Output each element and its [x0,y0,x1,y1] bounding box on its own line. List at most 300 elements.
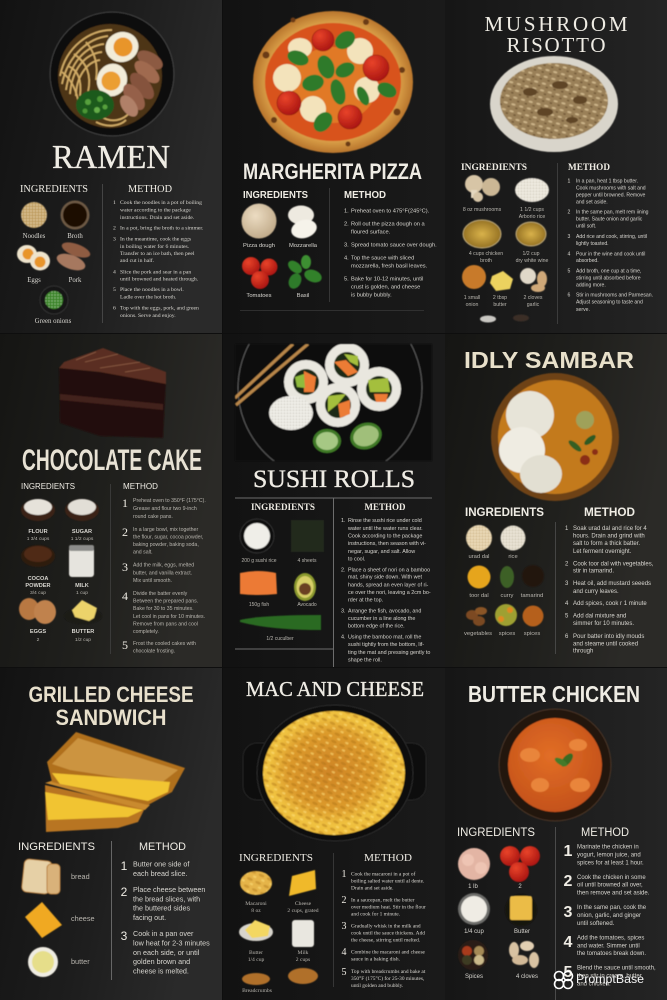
ingredients: cake: 1/2 cup [75,637,91,643]
image: pizza [253,11,413,153]
ingredients: sushi [240,519,324,642]
method text: ramen: water according to the package [120,208,191,214]
method text: ramen: Slice the pork and sear in a pan [120,270,191,276]
method text: grilled cheese: facing out. [133,913,166,922]
method text: butter chicken: spices for at least 1 hour. [577,860,644,866]
ingredients: mac: Macaroni [245,901,267,907]
method text: cake: Grease and flour two 9-inch [133,506,197,512]
method text: pizza: 5. [344,276,349,282]
method text: sushi: 4. [341,634,346,640]
panel: sushi rolls [234,334,445,667]
heading: method: METHOD [364,853,412,864]
method text: cake: Add the milk, eggs, melted [133,562,194,568]
panel: ramen [0,0,222,333]
method text: risotto: Stir in mushrooms and Parmesan. [576,292,653,298]
ingredients: mac: Breadcrumbs [242,988,272,994]
method text: idly: Add spices, cook r 1 minute [573,601,647,607]
method text: ramen: Cook the noodles in a pot of boiling [120,199,202,206]
method text: risotto: Pour in the wine and cook until [576,252,645,258]
method text: butter chicken: and water. Simmer until [577,944,640,950]
ingredients: ramen: Pork [69,277,82,284]
ingredients: ramen: Eggs [27,277,41,284]
heading: ingredients: INGREDIENTS [461,163,527,173]
method numbers: butter chicken: 1 [564,843,573,860]
method text: risotto: 4 [568,252,570,258]
ingredients: mac: 2 cups, grated [287,908,319,914]
image: risotto bowl [490,56,618,152]
ingredients: butter chicken: 1/4 cup [464,929,485,935]
image: idly bowl [491,373,619,501]
ingredients: butter chicken: 2 [518,884,522,890]
method text: ramen: In a pot, bring the broth to a simmer. [120,226,204,232]
method text: pizza: crust is golden, and cheese [351,284,420,290]
method text: sushi: Rinse the sushi rice under cold [348,518,422,524]
ingredients: sushi: 150g fish [249,602,269,608]
method text: idly: and curry leaves. [573,589,619,595]
method numbers: cake: 1 [122,496,128,510]
method text: butter chicken: then remove and set aside. [577,890,650,896]
panel: idly sambar [445,334,667,667]
panel: mac and cheese [223,668,445,1000]
method text: butter chicken: Blend the sauce until smooth, [577,966,656,972]
method text: cake: baking powder, baking soda, [133,542,199,548]
ingredients: risotto: 2 cloves [523,295,543,301]
method text: ramen: instructions. Drain and set aside. [120,215,195,221]
method text: sushi: cucumber in a line along the [348,616,415,622]
method text: risotto: 6 [568,292,570,298]
method numbers: grilled cheese: 3 [121,929,128,943]
panel: chocolate cake [0,334,222,667]
ingredients: mac: Milk [298,950,309,956]
title: butter chicken: BUTTER CHICKEN [468,681,640,707]
ingredients: risotto: garlic [527,302,540,308]
ingredients: risotto: 8 oz mushrooms [463,207,502,213]
method numbers: butter chicken: 5 [564,964,573,981]
method text: grilled cheese: each bread slice. [133,869,187,878]
heading: method: METHOD [584,507,635,519]
ingredients: idly: vegetables [464,631,492,637]
image: cake slice [59,348,166,438]
method text: sushi: Place a sheet of nori on a bamboo [348,568,430,574]
ingredients: pizza: Tomatoes [246,293,272,299]
method text: risotto: 2 [568,210,570,216]
image: ramen bowl [50,12,174,136]
method text: risotto: pepper until browned. Remove [576,192,646,198]
heading: ingredients: INGREDIENTS [239,853,313,864]
method text: pizza: Top the sauce with sliced [351,256,414,262]
method text: risotto: Add broth, one cup at a time, [576,268,641,274]
ingredients: ramen: Green onions [35,318,72,325]
method text: pizza: Bake for 10-12 minutes, until [351,276,423,282]
method text: ramen: until browned and heated through. [120,276,199,282]
method text: idly: Soak urad dal and rice for 4 [573,526,647,532]
heading: method: METHOD [581,827,629,839]
ingredients: risotto: onion [466,302,478,308]
method text: pizza: 1. [344,208,349,214]
method text: sushi: Arrange the fish, avocado, and [348,608,421,614]
method text: risotto: In a pan, heat 1 tbsp butter. [576,178,638,184]
method text: cake: Preheat oven to 350°F (175°C). [133,498,206,504]
method text: ramen: onions. Serve and enjoy. [120,313,176,319]
ingredients: idly: toor dal [469,593,489,599]
method text: sushi: 3. [341,608,346,614]
method text: cake: Frost the cooled cakes with [133,641,196,647]
method text: sushi: bottom edge of the rice. [348,624,405,630]
method text: cake: and salt. [133,550,153,556]
image: curry bowl [499,709,611,821]
method text: sushi: 2. [341,568,346,574]
method text: butter chicken: and chicken. [577,982,611,988]
ingredients: mac: Cheese [295,901,312,907]
method text: risotto: butter. Saute onion and garlic [576,216,643,222]
ingredients: mac [239,870,319,994]
method text: cake: Let cool in pans for 10 minutes. [133,614,205,620]
heading: method: METHOD [128,184,172,195]
method numbers: butter chicken: 3 [564,904,573,921]
method text: cake: In a large bowl, mix together [133,527,198,533]
method text: idly: Pour batter into idly mouds [573,634,644,640]
method numbers: cake: 5 [122,638,128,652]
watermark: PromptBase: PromptBase [576,972,644,986]
method text: grilled cheese: on each side, or until [133,948,200,957]
ingredients: cake: 3/4 cup [30,590,46,596]
method text: ramen: Top with the eggs, pork, and green [120,306,199,312]
ingredients: grilled cheese: bread [71,872,90,881]
method numbers: cake: 4 [122,589,128,603]
method text: butter chicken: Cook the chicken in some [577,875,646,881]
method text: ramen: Place the noodles in a bowl. [120,287,184,293]
ingredients: grilled cheese: cheese [71,914,95,923]
method text: risotto: Add rice and cook, stirring, until [576,234,647,240]
method text: idly: stir in tamarind. [573,568,614,574]
method text: risotto: adding more. [576,282,606,288]
image: sushi plate [234,343,432,462]
panel: mushroom risotto [445,0,667,333]
method text: ramen: Ladle over the hot broth. [120,294,177,300]
panel: grilled cheese [0,668,222,1000]
method text: pizza: Roll out the pizza dough on a [351,222,426,228]
method text: idly: 4 [565,601,569,607]
method text: pizza: is bubby bubbly. [351,292,392,298]
panel: margherita pizza [223,0,445,333]
ingredients: cake: 1 cup [76,590,88,596]
method text: mac: cook until the sauce thickens. Add [351,930,425,936]
method text: risotto: In the same pan, melt rem iining [576,210,649,216]
method numbers: mac: 2 [342,895,346,906]
method text: sushi: rder at the top. [348,598,383,604]
method text: idly: 1 [565,526,569,532]
method text: sushi: negar, sugar, and salt. Allow [348,549,415,555]
method text: idly: Add dal mixture and [573,614,626,620]
method text: mac: In a saucepan, melt the butter [351,898,415,904]
method text: cake: the flour, sugar, cocoa powder, [133,534,203,540]
watermark: PromptBase [554,972,644,988]
method text: butter chicken: Add the tomatoes, spices [577,936,644,942]
ingredients: cake: COCOA [28,576,48,582]
method numbers: mac: 5 [342,967,346,978]
method text: ramen: In the meantime, cook the eggs [120,236,192,242]
ingredients: idly: spices [499,631,515,637]
method text: butter chicken: the tomatoes break down. [577,951,646,957]
ingredients: butter chicken: Spices [465,974,483,980]
ingredients: cake: POWDER [25,583,51,589]
ingredients: butter chicken: 1 lb [468,884,478,890]
heading: method: METHOD [344,190,386,201]
title: grilled cheese sandwich: GRILLED CHEESE [28,682,194,707]
ingredients: grilled cheese [21,859,95,977]
method text: idly: simmer for 10 minutes. [573,621,634,627]
method text: risotto: until soft. [576,224,596,230]
method text: cake: round cake pans. [133,514,173,520]
method text: butter chicken: then stir in cream, butter [577,974,642,980]
method text: risotto: stirring until absorbed before [576,276,641,282]
method text: mac: Cook the macaroni in a pot of [351,870,416,878]
method text: pizza: mozzarella, fresh basil leaves. [351,264,428,270]
method text: idly: salt to form a thick batter. [573,541,640,547]
method text: cake: Bake for 30 to 35 minutes. [133,606,194,612]
ingredients: mac: 8 oz [251,908,261,914]
method text: grilled cheese: the bread slices, with [133,894,200,904]
ingredients: butter chicken: Butter [514,929,530,935]
ingredients: cake [19,499,102,643]
method text: grilled cheese: cheese is melted. [133,966,189,976]
method text: sushi: instructions, then season with vi- [348,541,426,547]
ingredients: pizza [242,204,324,299]
title: grilled cheese sandwich: SANDWICH [56,705,166,730]
method text: risotto: Adjust seasoning to taste and [576,300,643,306]
title: mushroom risotto: RISOTTO [506,33,606,57]
method text: mac: sauce in a baking dish. [351,956,400,962]
heading: method: METHOD [568,163,610,173]
method numbers: grilled cheese: 2 [121,885,128,899]
ingredients: mac: Butter [249,950,263,956]
method text: pizza: 2. [344,222,349,228]
heading: ingredients: INGREDIENTS [21,482,75,491]
ingredients: cake: SUGAR [72,529,92,535]
method text: grilled cheese: Butter one side of [133,860,189,868]
ingredients: pizza: Basil [297,293,309,299]
title: mushroom risotto [484,12,628,57]
method text: mac: until golden and bubbly. [351,983,403,989]
method text: sushi: hands, spread an even layer of ri- [348,582,429,588]
method text: mac: boiling salted water until al dente. [351,878,424,884]
ingredients: risotto: dry white wine [516,258,549,264]
method text: pizza: Preheat oven to 475°F(245°C). [351,208,430,214]
heading: ingredients: INGREDIENTS [251,502,315,512]
heading: method: METHOD [123,482,158,491]
method numbers: mac: 3 [342,921,346,932]
method numbers: butter chicken: 2 [564,873,573,890]
method text: sushi: ting the mat and pressing gently to [348,650,430,656]
method text: sushi: water until the water runs clear. [347,526,423,532]
method text: idly: through [573,648,593,654]
heading: ingredients: INGREDIENTS [20,184,88,195]
ingredients: risotto: broth [480,258,492,264]
method text: ramen: Transfer to an ice bath, then peel [120,250,195,257]
method text: mac: and cook for 1 minute. [351,910,400,918]
method text: risotto: absorbed. [576,258,599,264]
ingredients: risotto: butter [493,302,507,308]
ingredients: pizza: Mozzarella [289,243,318,249]
ingredients: cake: BUTTER [72,629,94,635]
method text: pizza: 3. [344,242,349,248]
ingredients: risotto [462,175,549,322]
method text: cake: completely. [133,629,159,635]
ingredients: idly: spices [524,631,540,637]
method text: cake: butter, and vanilla extract. [133,570,192,576]
title: grilled cheese sandwich [28,682,194,730]
method text: butter chicken: In the same pan, cook the [577,905,647,911]
method text: butter chicken: yogurt, lemon juice, and [577,852,641,858]
heading: ingredients: INGREDIENTS [457,827,535,839]
ingredients: mac: 2 cups [296,957,310,963]
ingredients: idly: curry [501,593,514,599]
method text: idly: Cook toor dal with vegetables, [573,562,654,568]
method text: ramen: and cut in half. [120,257,155,264]
method text: ramen: in boiling water for 6 minutes. [120,243,190,250]
ingredients: risotto: 4 cups chicken [469,251,503,257]
method text: idly: 6 [565,634,569,640]
ingredients: cake: 1 1/2 cups [71,536,94,542]
method text: grilled cheese: Cook in a pan over [133,929,194,938]
method text: sushi: mat, shiny side down. With wet [348,574,423,580]
method text: risotto: 3 [568,234,570,240]
method text: sushi: 1. [341,518,346,524]
ingredients: cake: 2 [37,637,40,643]
method text: mac: Combine the macaroni and cheese [351,950,426,956]
panel: butter chicken [445,668,667,1000]
title: mushroom risotto: MUSHROOM [484,12,628,36]
heading: ingredients: INGREDIENTS [18,841,95,853]
method text: cake: Divide the batter evenly [133,591,188,597]
method text: sushi: shape the roll. [348,658,382,664]
method text: cake: Between the prepared pans. [133,598,198,604]
method text: idly: and steame until cooked [573,642,638,648]
ingredients: risotto: Arborio rice [519,214,545,220]
method text: butter chicken: oil until browned all over, [577,882,643,888]
method text: mac: over medium heat. Stir in the flour [351,904,426,910]
method text: ramen: 2 [113,226,116,232]
method text: ramen: 1 [113,200,116,206]
title: margherita pizza: MARGHERITA PIZZA [243,159,422,184]
ingredients: pizza: Pizza dough [243,243,275,249]
ingredients: ramen: Noodles [23,233,46,240]
ingredients: idly: rice [508,554,518,560]
image: sandwich [45,732,185,832]
ingredients: grilled cheese: butter [71,957,90,966]
method text: mac: 350°F (175°C) for 25-30 minutes, [351,975,425,982]
ingredients: risotto: 2 tbsp [493,295,507,301]
method text: idly: 3 [565,581,569,587]
method numbers: grilled cheese: 1 [121,859,128,873]
method text: risotto: 5 [568,268,570,274]
method numbers: mac: 4 [342,947,346,958]
title: chocolate cake: CHOCOLATE CAKE [22,444,202,477]
method text: mac: Drain and set aside. [351,886,394,892]
image: mac skillet [243,705,426,841]
ingredients: idly: tamarind [521,593,543,599]
ingredients: butter chicken: 4 cloves [516,974,538,980]
ingredients: butter chicken [458,846,540,980]
method text: butter chicken: until softened. [577,921,615,927]
ingredients: cake: FLOUR [28,529,48,535]
title: sushi rolls: SUSHI ROLLS [253,464,415,493]
method text: idly: Heat oil, add mustard seeeds [573,581,651,587]
title: ramen: RAMEN [52,139,170,176]
method text: risotto: lightly toasted. [576,241,609,247]
method numbers: butter chicken: 4 [564,934,573,951]
method text: butter chicken: Marinate the chicken in [577,844,639,850]
method text: grilled cheese: Place cheese between [133,885,205,894]
method text: ramen: 3 [113,236,116,242]
method text: pizza: Spread tomato sauce over dough. [351,242,437,248]
method text: cake: Mix until smooth. [133,578,172,584]
method text: ramen: 6 [113,306,116,312]
ingredients: sushi: 4 sheets [298,558,317,564]
method text: pizza: 4. [344,256,349,262]
method text: sushi: Cook according to the package [348,534,422,540]
method text: sushi: to cool. [348,556,365,562]
ingredients: cake: MILK [75,583,89,589]
method text: idly: Let ferment overnight. [573,549,632,555]
method text: risotto: serve. [576,307,590,313]
method text: risotto: Cook mushrooms with salt and [576,186,646,192]
heading: ingredients: INGREDIENTS [465,507,544,519]
heading: method: METHOD [139,841,186,853]
method text: mac: Gradually whisk in the milk and [351,924,421,930]
method text: idly: hours. Drain and grind with [573,534,645,540]
title: mac and cheese: MAC AND CHEESE [246,677,424,701]
method text: grilled cheese: golden brown and [133,957,190,966]
ingredients: sushi: 1/2 cuculber [266,636,294,642]
ingredients: idly [464,525,544,637]
method text: risotto: 1 [568,178,570,184]
method text: ramen: 5 [113,287,116,293]
method text: grilled cheese: the buttered sides [133,904,191,912]
method text: sushi: ce over the nori, leaving a 2cm bo- [348,590,431,596]
method text: mac: Top with breadcrumbs and bake at [351,969,426,975]
method text: butter chicken: onion, garlic, and ginger [577,913,641,919]
ingredients: sushi: 200 g sushi rice [241,558,277,564]
method text: mac: the cheese, stirring until melted. [351,938,420,944]
ingredients: risotto: 1 small [464,295,480,301]
ingredients: risotto: 1 1/2 cups [520,207,544,213]
method numbers: cake: 3 [122,560,128,574]
method text: idly: 2 [565,562,569,568]
ingredients: cake: EGGS [30,629,46,635]
method text: cake: Remove from pans and cool [133,622,198,628]
title: idly sambar: IDLY SAMBAR [464,347,634,373]
method text: sushi: sushi tightly from the bottom, lif- [348,642,424,648]
method text: pizza: floured surface. [351,230,391,236]
method text: cake: chocolate frosting. [133,648,175,654]
method text: ramen: 4 [113,270,116,276]
ingredients: mac: 1/4 cup [248,957,265,963]
method text: idly: 5 [565,614,569,620]
ingredients: ramen [17,200,92,325]
method numbers: mac: 1 [342,869,346,880]
heading: ingredients: INGREDIENTS [243,190,308,201]
ingredients: sushi: Avocado [297,602,317,608]
method text: grilled cheese: low heat for 2-3 minutes [133,938,210,948]
ingredients: ramen: Broth [67,233,83,240]
heading: method: METHOD [364,502,406,512]
ingredients: risotto: 1/2 cup [522,251,540,257]
ingredients: idly: urad dal [469,554,489,560]
method text: risotto: and set aside. [576,200,608,206]
method numbers: cake: 2 [122,525,128,539]
method text: sushi: Using the bamboo mat, roll the [348,634,421,640]
